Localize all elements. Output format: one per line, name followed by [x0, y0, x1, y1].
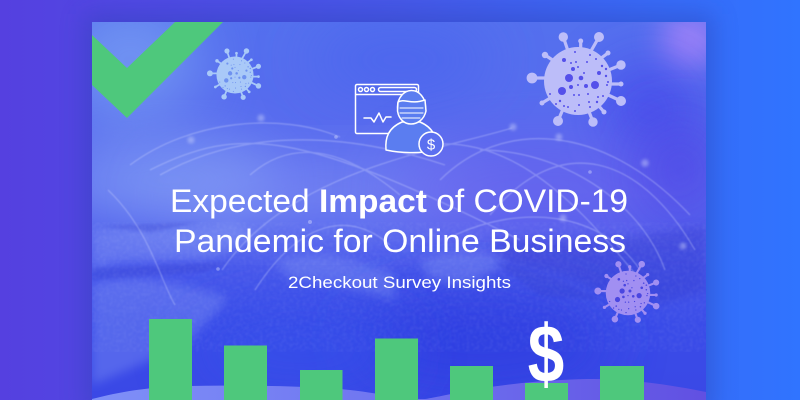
- green check mark: [92, 22, 223, 118]
- browser window: [356, 84, 418, 134]
- title: [170, 183, 628, 259]
- title: Pandemic for Online Business: [174, 223, 626, 259]
- background glows: [92, 22, 706, 387]
- network nodes: [188, 114, 686, 271]
- icon: dollar sign: $: [528, 308, 564, 400]
- world map texture: [92, 222, 706, 385]
- icon: small virus: [207, 48, 261, 100]
- person with mask: [386, 90, 436, 153]
- panel: poster card: [92, 22, 706, 400]
- bar chart: [149, 319, 644, 400]
- network arcs: [108, 123, 695, 305]
- subtitle: 2Checkout Survey Insights: [288, 273, 511, 292]
- icon: large virus: [527, 32, 626, 127]
- icon: masked person with browser window: [356, 84, 443, 156]
- title: Expected Impact of COVID-19: [170, 183, 628, 219]
- bottom wave: [92, 379, 706, 400]
- dollar coin: $: [427, 136, 436, 154]
- icon: lower virus: [594, 261, 659, 323]
